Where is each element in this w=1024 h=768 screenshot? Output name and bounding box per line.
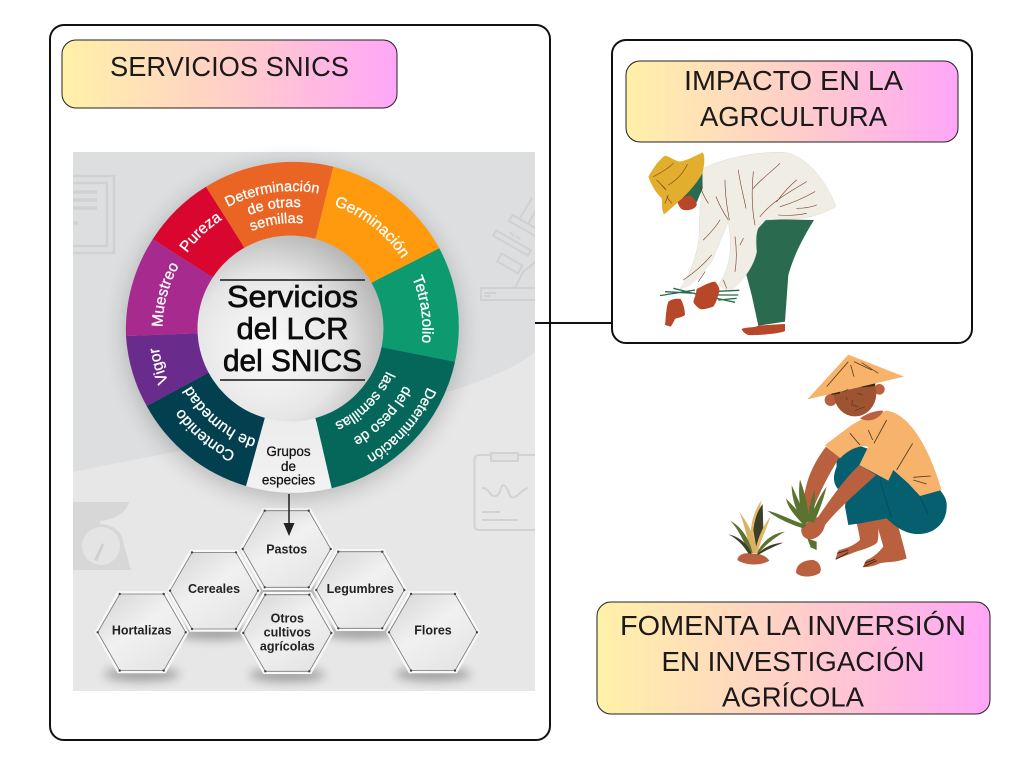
icon: microscope [481, 198, 542, 300]
segment: Grupos de especies [246, 328, 332, 493]
ring chart: servicios del LCR [116, 156, 469, 509]
segment: Determinación del peso de las semillas: Determinación [367, 388, 436, 462]
heading: fomenta la inversión: EN INVESTIGACIÓN [662, 646, 924, 677]
segment: Tetrazolio: Tetrazolio [413, 274, 434, 343]
hexagon: Hortalizas [95, 591, 189, 681]
icon: clipboard [474, 453, 544, 530]
segment: Contenido de humedad: Contenido [176, 410, 234, 460]
segment: Vigor [126, 333, 208, 406]
hexagon: Cereales: Cereales [188, 582, 240, 596]
hexagon: Flores [386, 591, 480, 681]
segment: Grupos de especies: especies [262, 472, 315, 488]
segment: Germinación [315, 166, 440, 283]
illustration: farmer planting [728, 355, 947, 577]
segment: Determinación del peso de las semillas [315, 347, 455, 488]
segment: Muestreo [126, 239, 213, 336]
segment: Vigor: Vigor [150, 348, 167, 386]
segment: Determinación del peso de las semillas: del peso de [354, 386, 411, 444]
panel: servicios SNICS [49, 24, 551, 741]
segment: Tetrazolio [372, 248, 459, 362]
soil mound [796, 560, 821, 577]
segment: Contenido de humedad [146, 372, 265, 486]
hexagon: Pastos [240, 508, 334, 598]
segment: Pureza [152, 186, 244, 278]
hexagon: Otros cultivos agrícolas [240, 592, 334, 682]
heading: servicios SNICS [62, 40, 397, 108]
hexagon: Legumbres: Legumbres [327, 582, 394, 596]
hexagon: Otros cultivos agrícolas: cultivos [264, 626, 311, 640]
diagram background [60, 152, 544, 691]
heading: servicios SNICS: SERVICIOS SNICS [110, 51, 349, 82]
segment: Determinación de otras semillas: de otras [248, 198, 300, 214]
segment: Determinación de otras semillas: semillas [250, 212, 303, 230]
ring hub title: del LCR [236, 311, 348, 346]
segment: Contenido de humedad: de humedad [182, 386, 255, 448]
head [807, 355, 904, 416]
heading: fomenta la inversión: AGRÍCOLA [722, 682, 864, 712]
icon: document [73, 175, 115, 254]
arrow connector to hexagons [284, 494, 294, 536]
segment: Muestreo: Muestreo [152, 263, 178, 326]
plant left [728, 500, 785, 564]
panel: impacto en la agricultura [612, 40, 972, 343]
heading: impacto en la agrcultura: AGRCULTURA [700, 101, 887, 132]
segment: Determinación de otras semillas [206, 162, 334, 248]
ring hub title: del SNICS [223, 343, 362, 378]
hexagon: Hortalizas: Hortalizas [112, 623, 172, 637]
ring hub title [198, 236, 384, 422]
segment: Germinación: Germinación [336, 197, 408, 258]
segment: Determinación del peso de las semillas: las semillas [336, 372, 396, 430]
connector line [535, 322, 612, 324]
hexagon: Cereales [167, 550, 261, 640]
heading: impacto en la agrcultura [626, 61, 958, 142]
heading: fomenta la inversión [597, 602, 990, 714]
segment: Grupos de especies: de [281, 459, 296, 474]
hexagon: Flores: Flores [414, 623, 452, 637]
hexagon: Otros cultivos agrícolas: Otros [271, 612, 304, 626]
hexagon: Legumbres [313, 549, 407, 639]
segment: Grupos de especies: Grupos [266, 444, 311, 459]
hexagon: Pastos: Pastos [266, 542, 307, 556]
heading: impacto en la agrcultura: IMPACTO EN LA [684, 65, 903, 96]
heading: fomenta la inversión: FOMENTA LA INVERSIÓN [620, 610, 966, 641]
segment: Pureza: Pureza [179, 214, 222, 252]
icon: scale [73, 502, 131, 570]
illustration: farmer bending [648, 152, 836, 335]
segment: Determinación de otras semillas: Determinación [224, 180, 319, 207]
hexagon: Otros cultivos agrícolas: agrícolas [260, 640, 315, 654]
ring hub title: Servicios [227, 279, 358, 314]
